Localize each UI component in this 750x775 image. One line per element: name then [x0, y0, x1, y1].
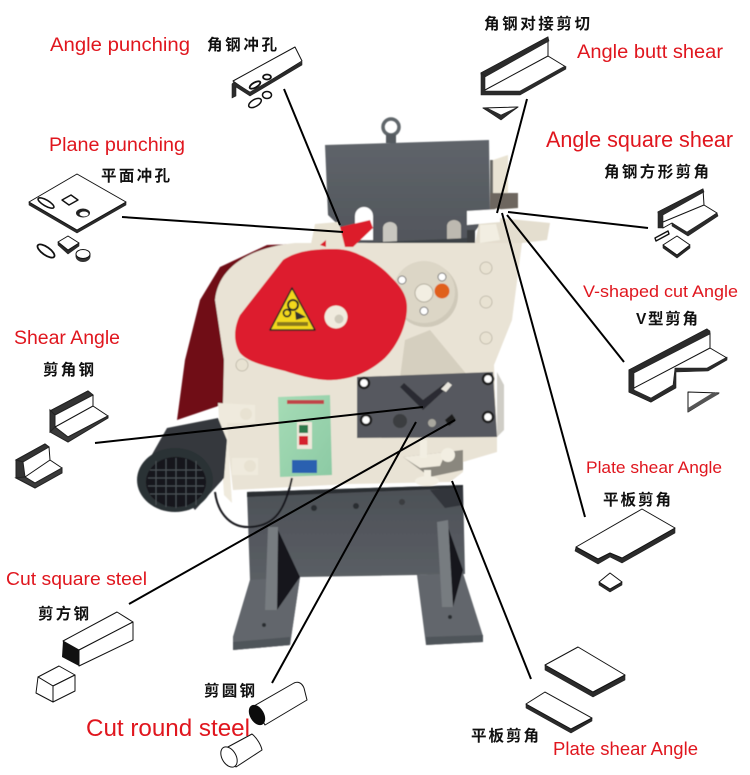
label: Plate shear Angle right: Plate shear Angle [586, 458, 722, 477]
label: 角钢冲孔: 角钢冲孔 [207, 35, 277, 54]
icon: cut round steel [217, 682, 307, 770]
oil cap [434, 284, 450, 298]
label: Cut square steel: Cut square steel [6, 569, 147, 589]
red cam cover [235, 249, 407, 380]
lower clamp [403, 440, 463, 486]
label: 角钢对接剪切: 角钢对接剪切 [484, 14, 590, 33]
icon: cut square steel [36, 612, 133, 702]
right side bolts [236, 262, 492, 371]
label: Plane punching: Plane punching [49, 135, 185, 156]
leader line: V-shaped cut [507, 215, 624, 362]
rotating disc [393, 261, 458, 327]
leader line: angle butt shear [497, 99, 527, 213]
machine photo [137, 119, 550, 650]
lower gray die plate [357, 372, 504, 438]
leader line: cut round steel [272, 422, 416, 683]
label: Cut round steel: Cut round steel [86, 715, 250, 742]
top left red punch [310, 220, 373, 249]
icon: angle butt shear [481, 37, 566, 120]
label: 剪方钢: 剪方钢 [38, 604, 89, 623]
base stand [233, 485, 483, 650]
cut stick piece [655, 231, 669, 241]
motor mount bracket [218, 403, 258, 503]
label: 平面冲孔: 平面冲孔 [101, 167, 170, 185]
electric motor [137, 418, 292, 527]
cam center hole [324, 306, 348, 328]
label: V型剪角: V型剪角 [636, 309, 698, 328]
icon: plate shear angle right [575, 509, 675, 592]
icon: plane punching [29, 174, 126, 262]
warning label [270, 288, 315, 330]
icon: shear angle lower [16, 444, 62, 488]
icon: angle square shear [655, 189, 718, 258]
label: 剪圆钢: 剪圆钢 [204, 681, 255, 700]
label: V-shaped cut Angle: V-shaped cut Angle [583, 282, 738, 301]
label: 平板剪角 right: 平板剪角 [603, 490, 671, 509]
label: 平板剪角 bottom: 平板剪角 [471, 726, 539, 745]
icon: shear angle upper [50, 391, 108, 442]
cream machine body [215, 243, 522, 490]
leader line: plate shear angle right [502, 213, 585, 517]
icon: plate shear angle bottom [526, 647, 625, 733]
label: Angle square shear: Angle square shear [546, 127, 733, 152]
label: Angle butt shear: Angle butt shear [577, 42, 724, 63]
icon: V-shaped cut angle [629, 329, 727, 412]
leader line: angle punching [284, 89, 340, 225]
upper gray plate [325, 140, 518, 248]
drive belt guard [177, 244, 295, 420]
leader line: plane punching [122, 217, 343, 232]
label: Shear Angle: Shear Angle [14, 328, 120, 349]
leader line: angle square shear [508, 212, 648, 228]
label: Plate shear Angle bottom: Plate shear Angle [553, 739, 698, 759]
leader line: shear angle [95, 407, 423, 443]
green switch box [278, 395, 332, 477]
label: 剪角钢: 剪角钢 [43, 360, 94, 379]
leader line: plate shear angle bottom [452, 481, 531, 679]
leader line: cut square steel [129, 420, 455, 604]
icon: angle punching [232, 47, 302, 110]
lifting eye bolt [383, 119, 399, 143]
top right shear bracket [467, 208, 550, 243]
label: 角钢方形剪角: 角钢方形剪角 [604, 162, 709, 181]
label: Angle punching: Angle punching [50, 35, 190, 56]
